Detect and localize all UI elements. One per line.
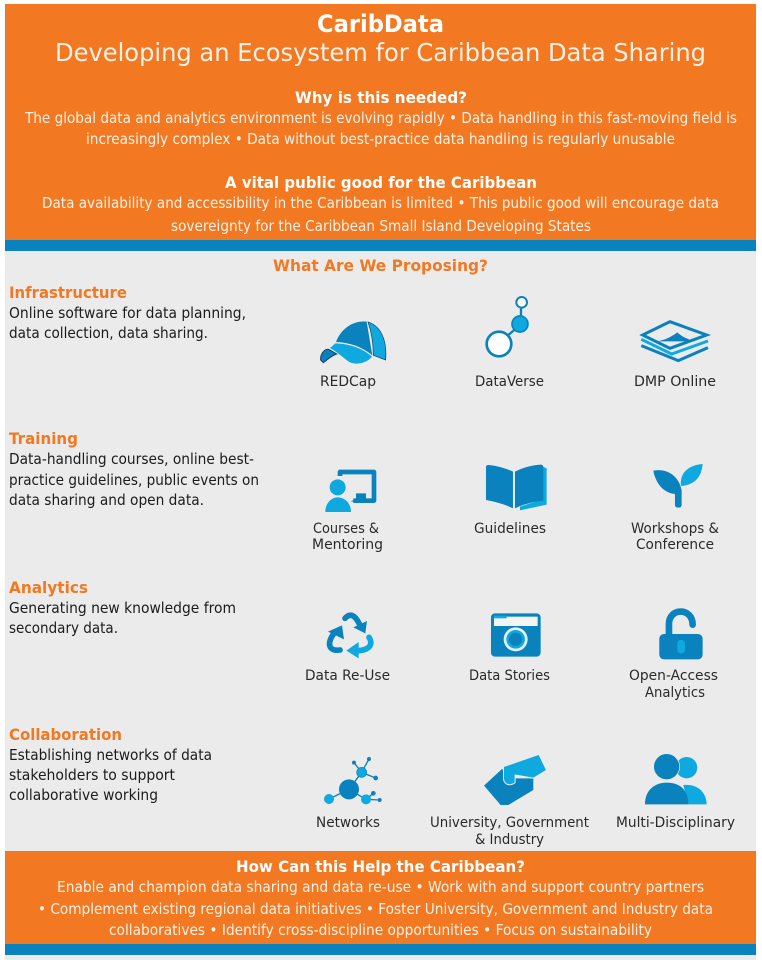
label: REDCap: REDCap bbox=[320, 374, 376, 390]
icon: data stories camera bbox=[491, 613, 541, 657]
text block: collaboration: Collaboration bbox=[9, 725, 122, 744]
text block: collaboration: collaborative working bbox=[9, 786, 158, 804]
heading: why is this needed: Why is this needed? bbox=[295, 88, 467, 107]
text block: public good: sovereignty for the Caribbean Small Island Developing States bbox=[171, 217, 591, 235]
icon: DataVerse nodes bbox=[487, 297, 528, 356]
text block: training: practice guidelines, public events on bbox=[9, 471, 259, 489]
text block: collaboration bbox=[9, 725, 212, 804]
icon: REDCap cap bbox=[321, 321, 386, 364]
label: open-access analytics bbox=[629, 668, 718, 701]
icon: workshops sprout bbox=[653, 464, 703, 508]
text block: training: Training bbox=[9, 429, 78, 448]
label: university, government and industry bbox=[430, 815, 589, 848]
label: guidelines: Guidelines bbox=[474, 521, 546, 537]
label: DataVerse: DataVerse bbox=[475, 374, 544, 390]
panel: header bbox=[5, 4, 756, 251]
icon: courses and mentoring bbox=[325, 472, 374, 512]
icon: networks bbox=[324, 757, 382, 804]
text block: training bbox=[9, 429, 259, 509]
label: university, government and industry: & Industry bbox=[475, 832, 544, 848]
text block: analytics: Generating new knowledge from bbox=[9, 599, 236, 617]
label: open-access analytics: Open-Access bbox=[629, 668, 718, 684]
label: DMP Online: DMP Online bbox=[634, 374, 716, 390]
text block: collaboration: Establishing networks of data bbox=[9, 746, 212, 764]
icon: DMP Online layers bbox=[641, 322, 708, 361]
label: networks: Networks bbox=[316, 815, 380, 831]
label: university, government and industry: University, Government bbox=[430, 815, 589, 831]
text block: collaboration: stakeholders to support bbox=[9, 766, 175, 784]
label: data stories: Data Stories bbox=[469, 668, 550, 684]
icon: multi-disciplinary people bbox=[645, 754, 707, 804]
label: courses and mentoring bbox=[312, 521, 383, 553]
text block: analytics: secondary data. bbox=[9, 619, 118, 637]
label: workshops and conference: Workshops & bbox=[631, 521, 719, 537]
label: workshops and conference: Conference bbox=[636, 537, 714, 553]
icon: data re-use arrows bbox=[328, 615, 371, 658]
label: multi-disciplinary: Multi-Disciplinary bbox=[616, 815, 735, 831]
icon: guidelines book bbox=[486, 465, 547, 510]
subtitle: Developing an Ecosystem for Caribbean Data Sharing bbox=[55, 38, 706, 67]
text block: infrastructure: Infrastructure bbox=[9, 283, 127, 302]
text block: benefits: Enable and champion data sharing and data re-use • Work with and support country partners bbox=[57, 878, 704, 896]
text block: training: data sharing and open data. bbox=[9, 491, 204, 509]
text block: why needed: increasingly complex • Data without best-practice data handling is regularly unusable bbox=[86, 130, 675, 148]
title: CaribData bbox=[317, 10, 444, 38]
text block: benefits: collaboratives • Identify cross-discipline opportunities • Focus on sustainability bbox=[109, 921, 652, 939]
text block: public good bbox=[42, 194, 719, 235]
text block: analytics: Analytics bbox=[9, 578, 88, 597]
text block: infrastructure: data collection, data sharing. bbox=[9, 324, 208, 342]
heading: how can this help: How Can this Help the Caribbean? bbox=[236, 857, 525, 876]
text block: why needed bbox=[24, 109, 737, 148]
label: data re-use: Data Re-Use bbox=[305, 668, 390, 684]
panel: proposal background bbox=[5, 251, 756, 851]
panel: how can this help bbox=[5, 851, 756, 960]
icon: handshake bbox=[484, 755, 546, 805]
text block: infrastructure bbox=[9, 283, 246, 342]
text block: training: Data-handling courses, online best- bbox=[9, 450, 254, 468]
label: courses and mentoring: Mentoring bbox=[312, 537, 383, 553]
text block: benefits bbox=[38, 878, 713, 939]
text block: infrastructure: Online software for data planning, bbox=[9, 304, 246, 322]
label: open-access analytics: Analytics bbox=[645, 685, 705, 701]
heading: vital public good: A vital public good for the Caribbean bbox=[225, 173, 537, 192]
label: workshops and conference bbox=[631, 521, 719, 553]
icon: open-access lock bbox=[659, 612, 703, 659]
label: courses and mentoring: Courses & bbox=[313, 521, 379, 537]
heading: what are we proposing: What Are We Proposing? bbox=[273, 256, 488, 275]
text block: analytics bbox=[9, 578, 236, 637]
